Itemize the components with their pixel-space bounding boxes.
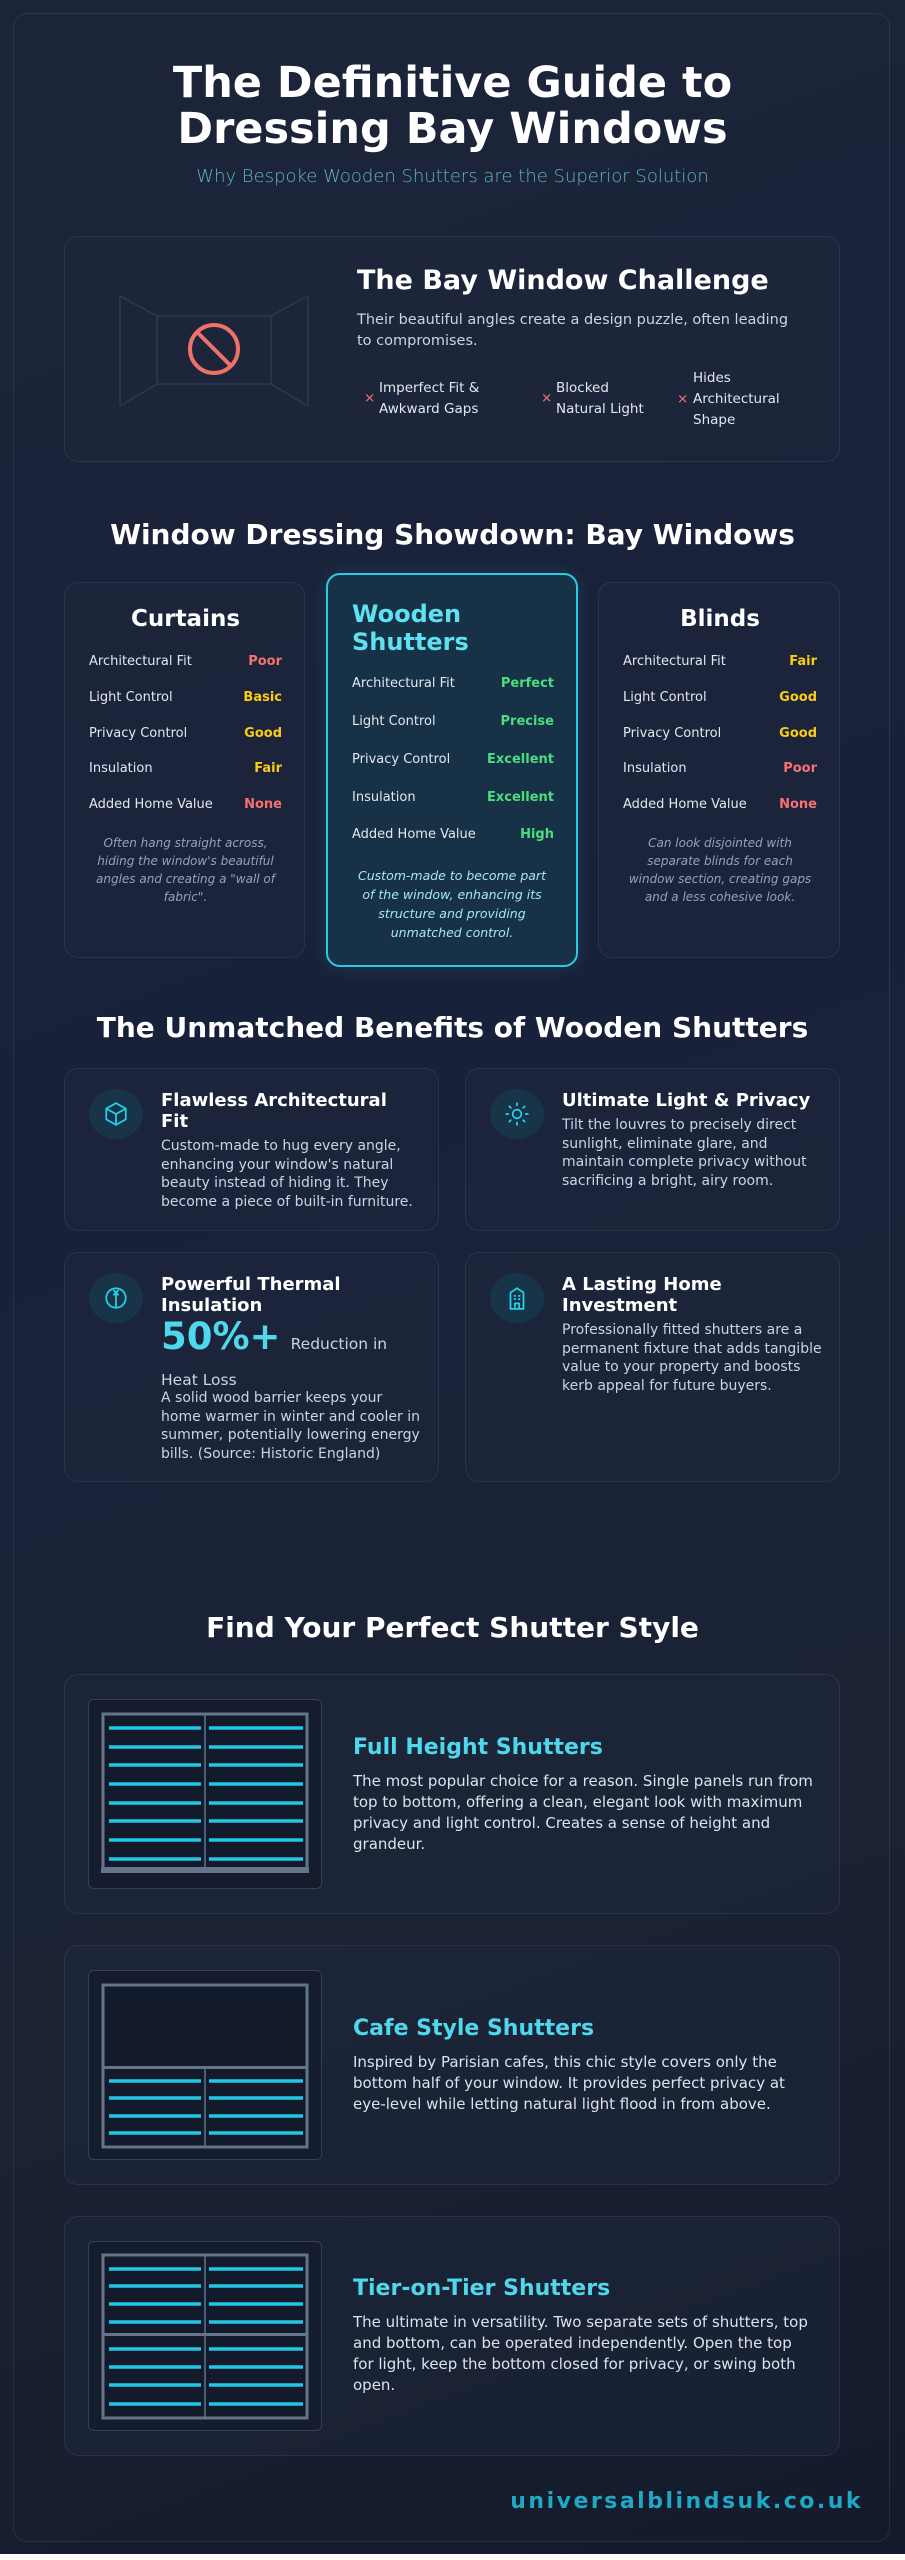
bullet: blocked light: Blocked [556, 380, 609, 396]
text: Custom-made to hug every angle, [161, 1138, 401, 1154]
text [352, 2313, 808, 2394]
stat: 50%+: Heat Loss [161, 1371, 237, 1389]
panel: curtains: Poor [248, 654, 282, 669]
panel: wooden shutters [326, 573, 578, 967]
panel: curtains [64, 582, 305, 958]
text: Professionally fitted shutters are a [562, 1322, 802, 1338]
panel: curtains: Added Home Value [89, 797, 213, 812]
panel: curtains: Good [244, 726, 282, 741]
bullet: hides shape: Shape [693, 412, 735, 428]
text [161, 1390, 420, 1462]
panel: benefit investment [465, 1252, 840, 1482]
note: shutters: Custom-made to become part of the window, enhancing its structure and providing unmatched control. [358, 868, 546, 940]
note: blinds: Can look disjointed with separate blinds for each window section, creating gaps and a less cohesive look. [629, 836, 811, 904]
text: The most popular choice for a reason. Single panels run from [353, 1772, 813, 1790]
bullet: hides shape [677, 370, 780, 428]
text: home warmer in winter and cooler in [161, 1408, 420, 1424]
panel: full height [64, 1674, 840, 1914]
panel: curtains: Basic [243, 690, 282, 705]
panel: benefit light & privacy [465, 1068, 840, 1231]
heading: blinds: Blinds [680, 606, 760, 632]
illustration: cafe shutter [88, 1970, 322, 2160]
text: Tilt the louvres to precisely direct [562, 1117, 796, 1133]
panel: blinds: Added Home Value [623, 797, 747, 812]
bullet: blocked light: × [541, 390, 552, 406]
panel: blinds: Good [779, 726, 817, 741]
bullet: blocked light: Natural Light [556, 401, 644, 417]
text: Inspired by Parisian cafes, this chic style covers only the [353, 2053, 777, 2071]
bullet: hides shape: × [677, 391, 688, 407]
text: kerb appeal for future buyers. [562, 1378, 772, 1394]
text [161, 1138, 413, 1210]
text: eye-level while letting natural light flood in from above. [353, 2095, 771, 2113]
panel: blinds: Fair [789, 654, 817, 669]
text: enhancing your window's natural [161, 1156, 393, 1172]
heading: challenge: The Bay Window Challenge [357, 265, 769, 296]
panel: curtains: Architectural Fit [89, 654, 192, 669]
panel: blinds [598, 582, 840, 958]
heading: showdown: Window Dressing Showdown: Bay Windows [110, 518, 795, 551]
text: value to your property and boosts [562, 1359, 800, 1375]
text: maintain complete privacy without [562, 1154, 807, 1170]
heading: benefits: The Unmatched Benefits of Wooden Shutters [97, 1011, 808, 1044]
icon: thermal [89, 1273, 143, 1323]
panel: bay window challenge [64, 236, 840, 462]
title: The Definitive Guide to [173, 58, 732, 108]
bullet: blocked light [541, 380, 644, 417]
text [562, 1117, 807, 1188]
panel: benefit thermal [64, 1252, 439, 1482]
panel: curtains: Insulation [89, 761, 153, 776]
illustration: tier-on-tier shutter [88, 2241, 322, 2431]
text: bills. (Source: Historic England) [161, 1446, 380, 1462]
panel: wooden shutters: High [520, 827, 554, 842]
text: bottom half of your window. It provides perfect privacy at [353, 2074, 785, 2092]
bullet: imperfect fit: Imperfect Fit & [379, 380, 479, 396]
heading: Flawless Architectural Fit [161, 1090, 387, 1132]
text: for light, keep the bottom closed for privacy, or swing both [353, 2355, 796, 2373]
panel: blinds: Light Control [623, 690, 707, 705]
panel: wooden shutters: Architectural Fit [352, 676, 455, 691]
panel: curtains: Privacy Control [89, 726, 187, 741]
text [562, 1322, 822, 1394]
stat: 50%+ [161, 1315, 387, 1389]
stat: 50%+: 50%+ Reduction in [161, 1315, 387, 1358]
panel: wooden shutters: Light Control [352, 714, 436, 729]
panel: curtains: Fair [254, 761, 282, 776]
text: open. [353, 2376, 395, 2394]
text [353, 2053, 785, 2113]
heading: Powerful Thermal Insulation [161, 1274, 341, 1316]
title [173, 58, 732, 154]
bullet: imperfect fit: × [364, 390, 375, 406]
bullet: hides shape: Hides [693, 370, 731, 386]
heading: styles: Find Your Perfect Shutter Style [206, 1611, 699, 1644]
text: sunlight, eliminate glare, and [562, 1136, 768, 1152]
bullet: imperfect fit: Awkward Gaps [379, 401, 478, 417]
title: Dressing Bay Windows [177, 104, 728, 154]
panel: blinds: Good [779, 690, 817, 705]
text: summer, potentially lowering energy [161, 1427, 420, 1443]
panel: wooden shutters: Excellent [487, 790, 554, 805]
panel: blinds: None [779, 797, 817, 812]
panel: wooden shutters: Privacy Control [352, 752, 450, 767]
heading: A Lasting Home Investment [562, 1274, 722, 1316]
icon: sun [490, 1089, 544, 1139]
panel: curtains: Light Control [89, 690, 173, 705]
panel: blinds: Insulation [623, 761, 687, 776]
text: challenge intro: Their beautiful angles create a design puzzle, often leading to compromises. [357, 312, 788, 349]
text: beauty instead of hiding it. They [161, 1175, 389, 1191]
note: curtains: Often hang straight across, hiding the window's beautiful angles and creating a "wall of fabric". [96, 836, 275, 904]
text [352, 1772, 813, 1853]
heading: wooden shutters: Wooden [352, 600, 461, 628]
panel: blinds: Poor [783, 761, 817, 776]
text: The ultimate in versatility. Two separate sets of shutters, top [353, 2313, 808, 2331]
footer: website: universalblindsuk.co.uk [510, 2489, 863, 2514]
heading: Full Height Shutters [353, 1735, 603, 1760]
heading: curtains: Curtains [131, 606, 240, 632]
icon: building [490, 1273, 544, 1323]
text: become a piece of built-in furniture. [161, 1194, 413, 1210]
panel: wooden shutters: Insulation [352, 790, 416, 805]
heading: Tier-on-Tier Shutters [353, 2276, 610, 2301]
bullet: hides shape: Architectural [693, 391, 780, 407]
text: A solid wood barrier keeps your [161, 1390, 382, 1406]
bullet: imperfect fit [364, 380, 479, 417]
panel: wooden shutters: Added Home Value [352, 827, 476, 842]
panel: blinds: Architectural Fit [623, 654, 726, 669]
text: top to bottom, offering a clean, elegant look with maximum [353, 1793, 802, 1811]
heading: Ultimate Light & Privacy [562, 1090, 810, 1111]
panel: curtains: None [244, 797, 282, 812]
text: privacy and light control. Creates a sense of height and [353, 1814, 770, 1832]
text: grandeur. [353, 1835, 425, 1853]
subtitle: Why Bespoke Wooden Shutters are the Superior Solution [196, 166, 709, 187]
text: sacrificing a bright, airy room. [562, 1172, 773, 1188]
panel: benefit architectural fit [64, 1068, 439, 1231]
heading: Cafe Style Shutters [353, 2016, 594, 2041]
text: and bottom, can be operated independently. Open the top [353, 2334, 792, 2352]
panel: wooden shutters: Precise [501, 714, 554, 729]
illustration: full height shutter [88, 1699, 322, 1889]
icon: cube [89, 1089, 143, 1139]
panel: blinds: Privacy Control [623, 726, 721, 741]
text: permanent fixture that adds tangible [562, 1340, 822, 1356]
panel: wooden shutters: Excellent [487, 752, 554, 767]
heading: wooden shutters [352, 600, 469, 656]
panel: wooden shutters: Perfect [501, 676, 554, 691]
heading: wooden shutters: Shutters [352, 628, 469, 656]
icon: bay window with no sign [119, 296, 309, 406]
panel: cafe style [64, 1945, 840, 2185]
panel: tier on tier [64, 2216, 840, 2456]
